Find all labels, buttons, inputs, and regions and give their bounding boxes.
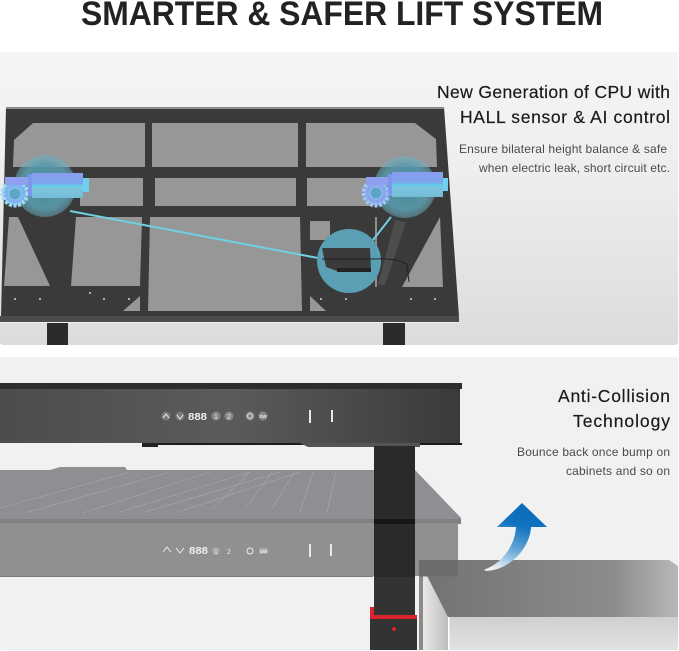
heading: CPU: New Generation of CPU with: [437, 82, 670, 102]
control panel: SW: [259, 414, 267, 419]
text: anti-collision description: [517, 445, 670, 478]
icon: right motor: [364, 156, 448, 218]
desk legs: [47, 322, 405, 345]
text: CPU description: when electric leak, short circuit etc.: [478, 161, 670, 175]
text: CPU description: [459, 142, 670, 175]
ghost control panel: 888: [189, 546, 208, 557]
control panel: 888: [188, 412, 207, 423]
control panel: 1: [214, 414, 218, 421]
control panel: [162, 410, 333, 423]
heading: CPU: HALL sensor & AI control: [460, 107, 670, 127]
ghost control panel: [163, 544, 332, 557]
panel: anti-collision: [0, 357, 678, 650]
ghost desk lower position: [0, 467, 461, 577]
desk underside frame: [0, 107, 459, 323]
heading: anti-collision: Technology: [573, 411, 670, 431]
desk upper position: [0, 383, 462, 447]
text: CPU description: Ensure bilateral height balance & safe: [459, 142, 667, 156]
icon: left motor: [2, 155, 89, 217]
cabinet: [419, 560, 678, 650]
ghost control panel: 1: [214, 549, 218, 556]
text: anti-collision description: Bounce back once bump on: [517, 445, 670, 459]
heading: anti-collision: Anti-Collision: [558, 386, 670, 406]
text: anti-collision description: cabinets and so on: [566, 464, 670, 478]
icon: power box highlight: [317, 229, 409, 293]
connection lines: [70, 211, 391, 258]
control panel: 2: [227, 414, 231, 421]
ghost control panel: 2: [227, 549, 231, 556]
ghost control panel: SW: [260, 549, 268, 554]
arrow: bounce up: [484, 503, 547, 571]
heading: CPU: [437, 82, 670, 127]
desk leg column: [370, 446, 417, 650]
panel: CPU and HALL sensor: [0, 52, 678, 345]
heading: anti-collision: [558, 386, 670, 431]
